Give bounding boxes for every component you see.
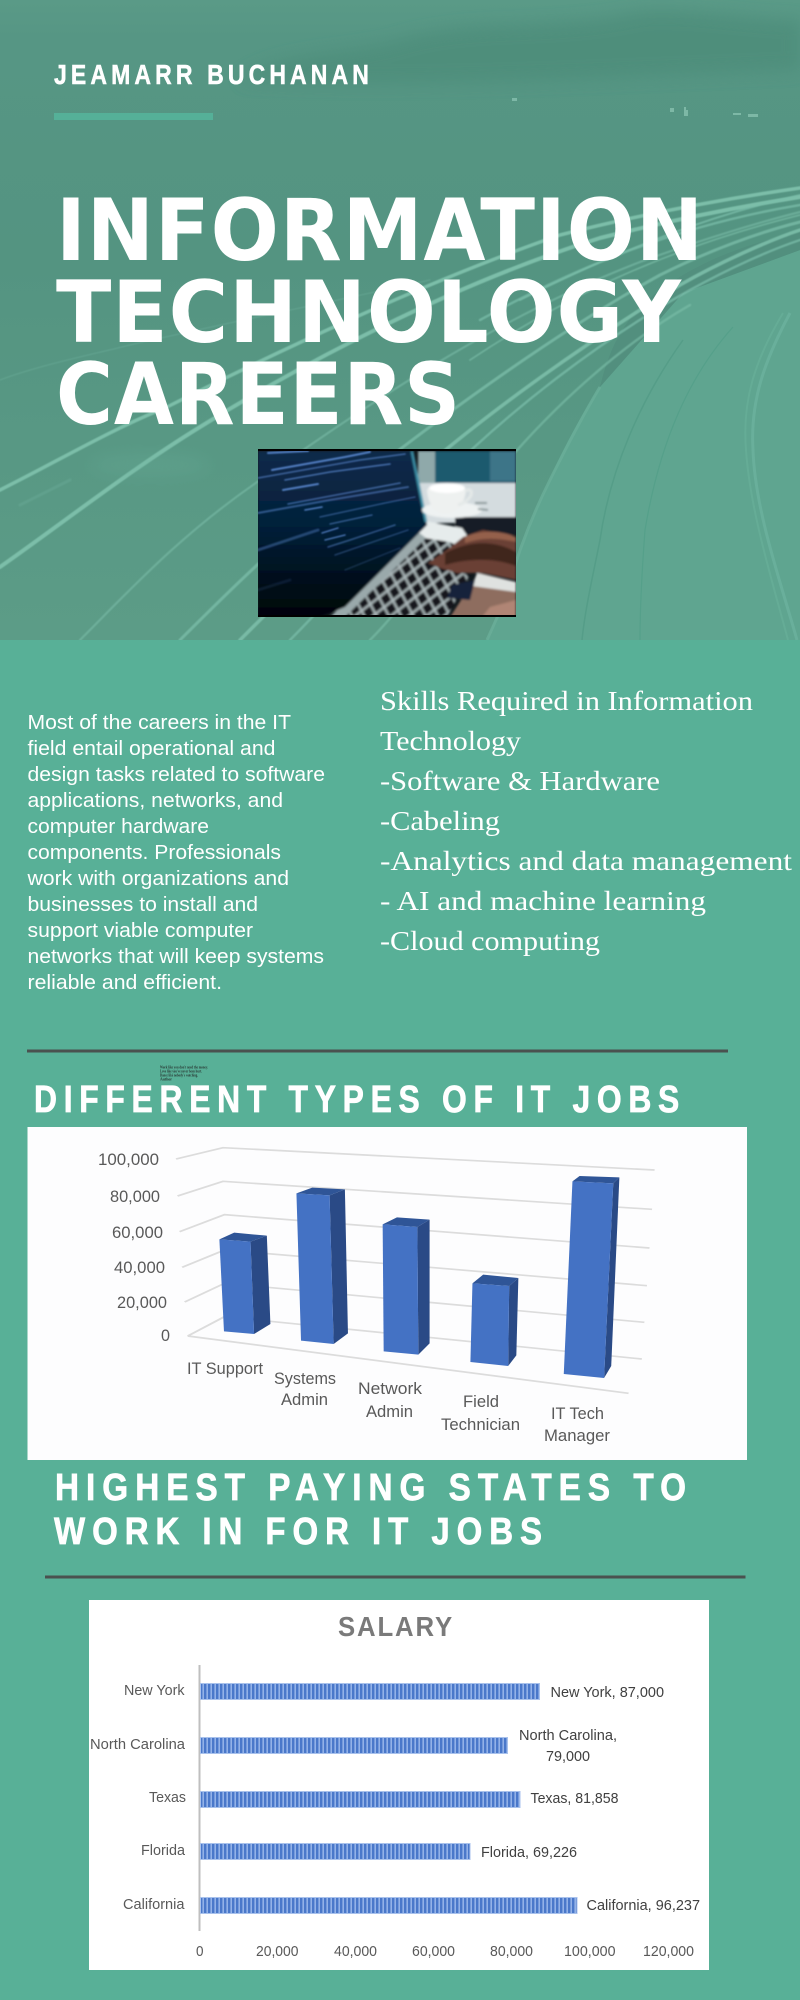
intro paragraph: Most of the careers in the IT [28,712,291,734]
skills list: -Analytics and data management [380,846,793,876]
state labels: Florida [141,1842,186,1859]
data labels: North Carolina, [519,1727,617,1744]
category labels: IT Support [187,1359,263,1378]
skills list: -Software & Hardware [380,766,660,796]
salary axis labels: 40,000 [334,1943,377,1960]
value axis labels: 0 [161,1326,170,1345]
salary axis labels: 80,000 [490,1943,533,1960]
skills list: Skills Required in Information [380,686,754,716]
salary axis labels: 100,000 [564,1943,616,1960]
skills list: Technology [380,726,522,756]
title: TECHNOLOGY [56,263,683,363]
tiny quote text: Love like you've never been hurt. [160,1068,202,1074]
category labels: Technician [441,1415,520,1434]
panel: salary bar chart [89,1600,709,1970]
skills list [380,686,793,956]
value axis labels: 100,000 [98,1150,159,1169]
intro paragraph [26,712,325,994]
salary axis labels: 0 [196,1943,204,1960]
state labels: California [123,1896,185,1913]
title: INFORMATION [56,181,704,281]
title [56,181,704,445]
value axis labels: 60,000 [112,1223,163,1242]
skills list: - AI and machine learning [380,886,706,916]
category labels: Admin [366,1402,413,1421]
intro paragraph: networks that will keep systems [28,946,324,968]
horizontal bars [200,1684,577,1914]
category labels [187,1359,610,1445]
data labels: California, 96,237 [586,1897,700,1914]
data labels [481,1684,700,1914]
intro paragraph: field entail operational and [28,738,276,760]
tiny quote text [160,1064,208,1082]
salary axis labels: 120,000 [643,1943,694,1960]
heading: highest paying states: WORK IN FOR IT JOBS [54,1511,549,1553]
category labels: IT Tech [551,1404,604,1423]
salary axis labels: 20,000 [256,1943,298,1960]
data labels: Texas, 81,858 [530,1790,618,1807]
state labels [90,1682,186,1913]
category labels: Network [358,1379,423,1398]
intro paragraph: businesses to install and [28,894,258,916]
data labels: 79,000 [546,1748,590,1765]
salary axis labels [196,1943,694,1960]
intro paragraph: computer hardware [28,816,209,838]
intro paragraph: design tasks related to software [28,764,325,786]
salary axis labels: 60,000 [412,1943,455,1960]
intro paragraph: work with organizations and [26,868,289,890]
category axis line [198,1665,200,1931]
author name: JEAMARR BUCHANAN [54,59,373,90]
heading: highest paying states: HIGHEST PAYING STATES TO [55,1467,693,1509]
state labels: Texas [149,1789,186,1806]
data labels: Florida, 69,226 [481,1844,577,1861]
state labels: North Carolina [90,1736,186,1753]
tiny quote text: Author [160,1076,172,1082]
heading: different types of IT jobs: DIFFERENT TYPES OF IT JOBS [34,1079,686,1121]
category labels: Admin [281,1390,328,1409]
bars [219,1176,619,1378]
chart title: SALARY [338,1611,454,1642]
intro paragraph: applications, networks, and [28,790,283,812]
intro paragraph: reliable and efficient. [28,972,222,994]
category labels: Field [463,1392,499,1411]
data labels: New York, 87,000 [550,1684,664,1701]
category labels: Systems [274,1369,336,1388]
tiny quote text: Work like you don't need the money. [160,1064,208,1070]
value axis labels: 20,000 [117,1293,167,1312]
heading: highest paying states [54,1467,693,1553]
value axis labels [98,1150,170,1345]
value axis labels: 80,000 [110,1187,160,1206]
category labels: Manager [544,1426,610,1445]
panel: 3D bar chart of IT jobs [28,1127,747,1460]
title: CAREERS [56,345,461,445]
state labels: New York [124,1682,185,1699]
skills list: -Cabeling [380,806,500,836]
tiny quote text: Dance like nobody's watching. [160,1072,198,1078]
accent bar [54,113,213,120]
skills list: -Cloud computing [380,926,600,956]
intro paragraph: support viable computer [28,920,253,942]
photo: hands typing code on a laptop [258,449,516,617]
hero banner with highway photo [0,0,800,640]
intro paragraph: components. Professionals [28,842,281,864]
value axis labels: 40,000 [114,1258,165,1277]
